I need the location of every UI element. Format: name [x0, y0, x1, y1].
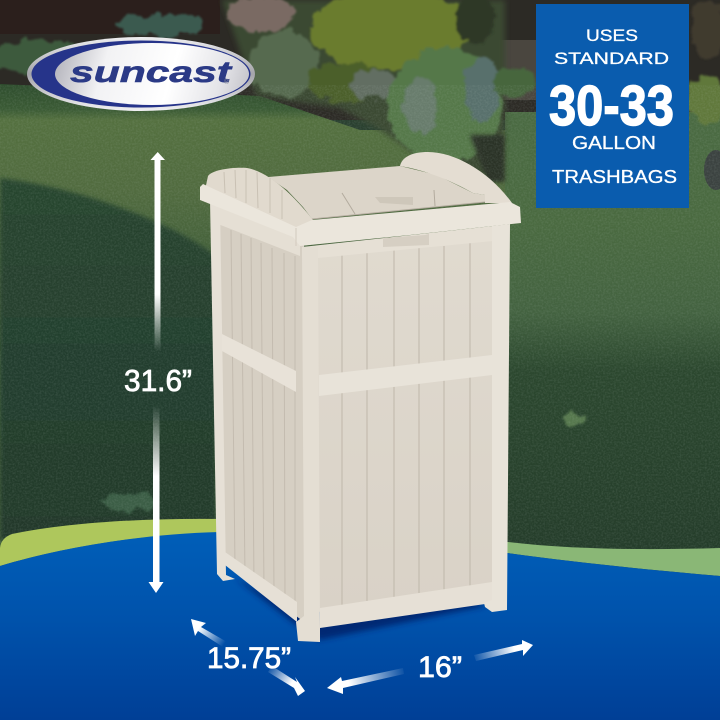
label: depth: 15.75”: [207, 642, 291, 675]
text: 30-33: 30-33: [549, 74, 674, 138]
text: gallon: GALLON: [572, 133, 656, 153]
left side panel: [218, 200, 304, 622]
bin shadow: [235, 578, 486, 640]
left side top band: [218, 204, 300, 256]
right post: [484, 224, 510, 612]
front top band: [302, 226, 493, 258]
swoosh: left green band: [0, 519, 220, 566]
tree trunk and shadow: [470, 135, 505, 182]
front panel: [318, 230, 494, 612]
label: height: 31.6”: [124, 363, 192, 398]
registered mark: ®: [224, 78, 230, 86]
lid handle: [375, 197, 413, 205]
left side planks: [231, 230, 295, 610]
rim corner shade: [295, 228, 297, 246]
label: width: 16”: [418, 651, 462, 684]
callout: blue capacity box: [536, 4, 689, 208]
product: trash hideaway bin: [200, 152, 521, 642]
dark fence: [0, 0, 720, 120]
arrow: height down: [148, 405, 164, 593]
guard ribs: [224, 170, 282, 219]
left lawn: [0, 84, 510, 560]
left bottom rail: [225, 552, 297, 622]
dark lawn patch left: [0, 178, 216, 540]
arrow: width right: [474, 640, 533, 661]
shrub base mass: [222, 0, 505, 175]
logo: suncast oval: [27, 37, 255, 111]
text: standard: STANDARD: [554, 49, 669, 68]
floor: blue curved area: [0, 532, 720, 720]
front bottom rail: [320, 582, 492, 628]
logo wordmark: suncast: [70, 56, 234, 89]
swoosh: right green band: [500, 541, 720, 576]
latch notch: [383, 234, 429, 247]
left post: [210, 200, 235, 581]
left lid guard: [205, 168, 313, 229]
arrow: height up: [150, 152, 165, 352]
rim: [200, 184, 521, 246]
arrow: depth front: [268, 666, 305, 696]
rock: [704, 150, 720, 190]
text: uses: USES: [586, 26, 638, 45]
lid seams: [312, 190, 485, 219]
front planks: [342, 243, 470, 606]
lawn grain: [0, 85, 720, 565]
left middle rail: [222, 334, 296, 392]
lid top: [268, 166, 485, 219]
shrubs: [0, 0, 720, 511]
right lid guard: [400, 152, 512, 203]
front middle rail: [319, 355, 492, 396]
arrow: depth back: [191, 619, 227, 647]
right lawn: [505, 112, 720, 560]
arrow: width left: [327, 668, 404, 694]
corner post: [296, 247, 320, 642]
text: trashbags: TRASHBAGS: [552, 167, 677, 187]
